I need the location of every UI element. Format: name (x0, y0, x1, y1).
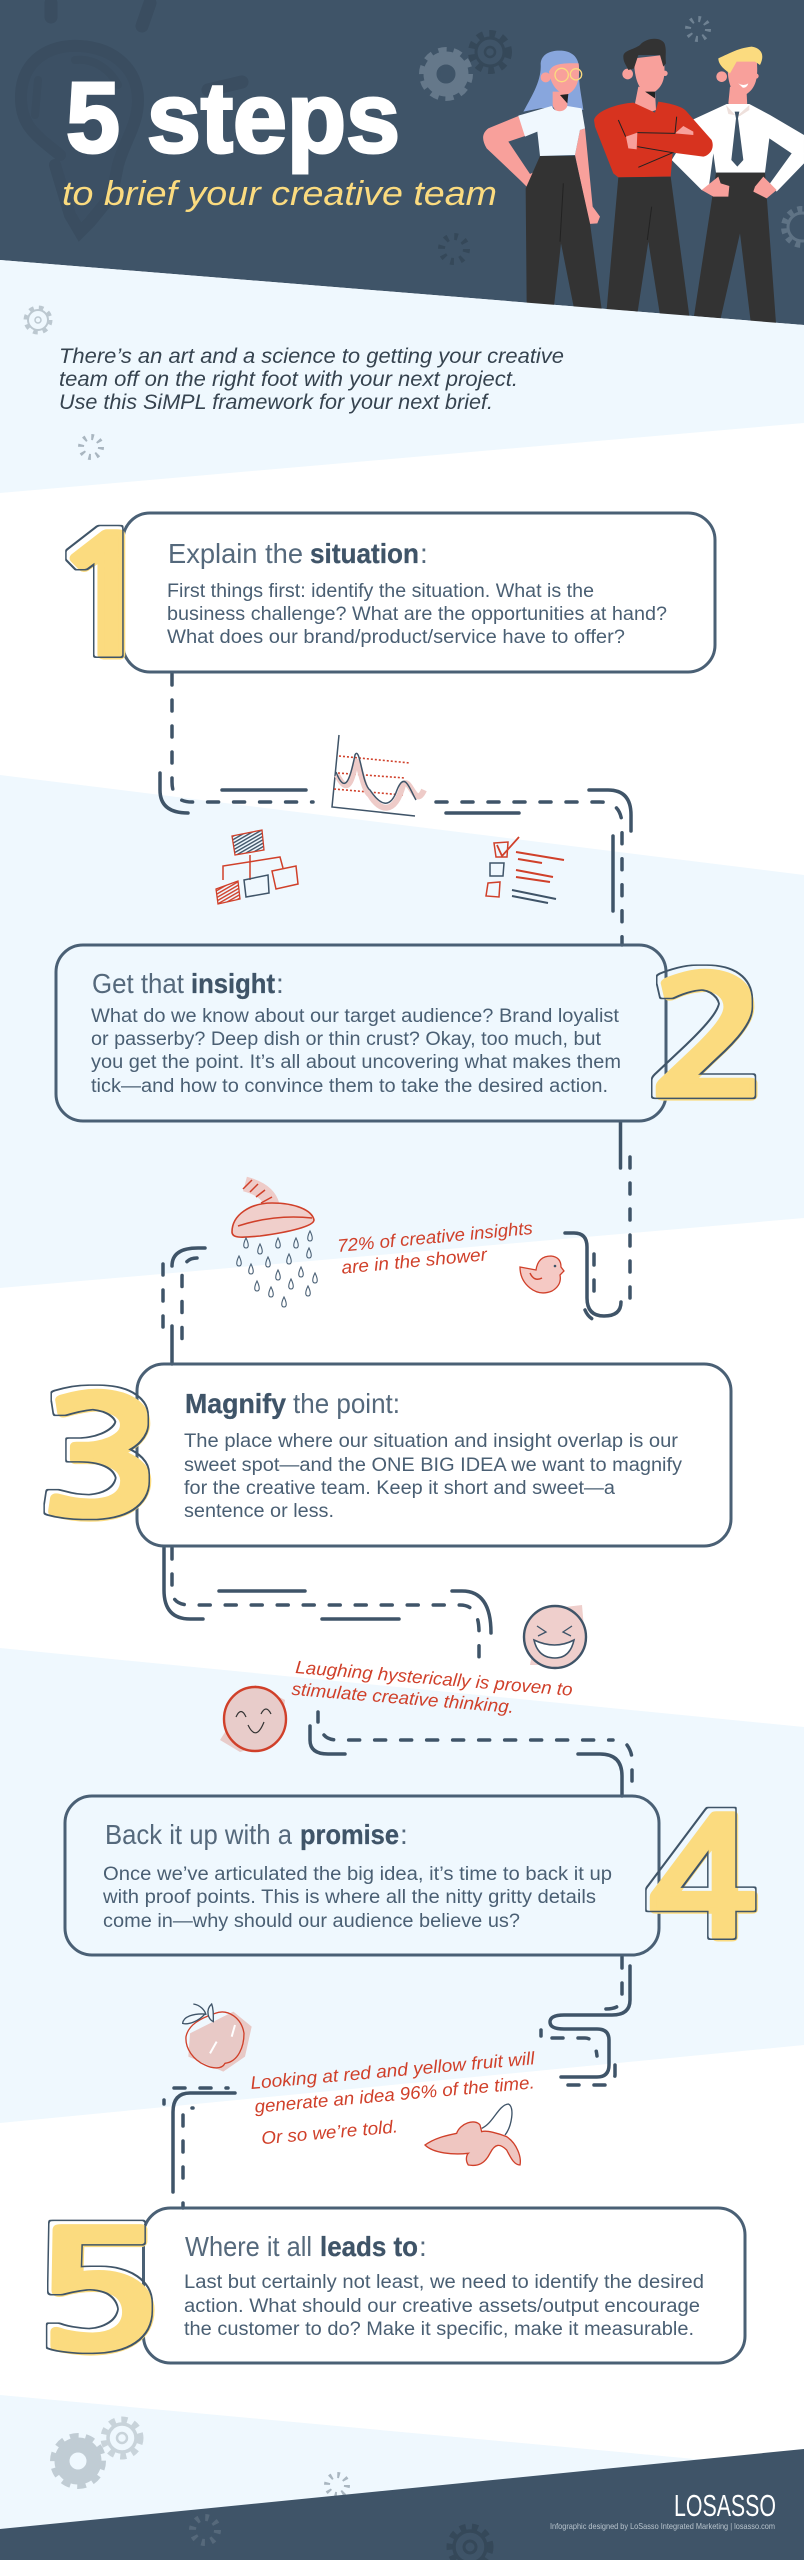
subtitle: to brief your creative team (62, 175, 497, 213)
callout: laughing stat: stimulate creative thinking. (291, 1679, 515, 1717)
body text: tick—and how to convince them to take the desired action. (91, 1076, 608, 1097)
icon: gear right edge (784, 209, 804, 245)
callout: fruit stat: Or so we’re told. (260, 2116, 399, 2148)
callout: laughing stat: Laughing hysterically is proven to (295, 1657, 573, 1700)
heading: : (419, 2231, 427, 2262)
intro text: team off on the right foot with your next project. (59, 368, 518, 391)
body text: What does our brand/product/service have to offer? (167, 627, 625, 648)
body text: sentence or less. (184, 1501, 334, 1522)
icon: sparkle dark (442, 236, 466, 262)
body text: you get the point. It’s all about uncovering what makes them (91, 1052, 621, 1073)
number 1: 1 (45, 515, 163, 678)
band 3 background (0, 1648, 804, 2123)
panel: step 4 (65, 1796, 760, 1962)
icon: footer outline gear (104, 2420, 140, 2456)
icon: filled gear (424, 52, 468, 96)
number 2: 2 (648, 960, 772, 1122)
panel: step 1 (45, 513, 715, 681)
icon: light bulb watermark (21, 3, 242, 232)
number 4: 4 (648, 1801, 760, 1962)
body text (184, 1431, 683, 1522)
body text: Once we’ve articulated the big idea, it’s time to back it up (103, 1864, 612, 1885)
icon: smiling face (220, 1685, 286, 1752)
header background (0, 0, 804, 325)
heading: : (420, 538, 428, 569)
person: man in white shirt and tie (672, 47, 804, 323)
body text (91, 1006, 621, 1097)
callout: fruit stat (250, 2048, 541, 2149)
body text: First things first: identify the situation. What is the (167, 581, 594, 602)
icon: banana (425, 2104, 520, 2165)
body text: with proof points. This is where all the nitty gritty details (102, 1887, 596, 1908)
connector: step 4 to step 5 (164, 1957, 630, 2208)
number 1: 1 (48, 518, 166, 681)
heading: leads to (320, 2231, 418, 2262)
body text: or passerby? Deep dish or thin crust? Okay, too much, but (91, 1029, 602, 1050)
heading (92, 968, 284, 999)
intro text: There’s an art and a science to getting your creative (59, 345, 564, 368)
callout: shower stat: are in the shower (341, 1244, 489, 1278)
heading: Magnify (185, 1388, 286, 1419)
callout: laughing stat (291, 1657, 573, 1722)
body text: Last but certainly not least, we need to identify the desired (184, 2272, 704, 2293)
heading: Back it up with a (105, 1819, 292, 1850)
body text (167, 581, 667, 648)
connector: step 1 to step 2 (160, 674, 631, 945)
intro text: Use this SiMPL framework for your next brief. (59, 391, 493, 414)
connector: step 2 to step 3 (163, 1122, 630, 1364)
title: 5 steps (66, 62, 400, 174)
number 5: 5 (33, 2214, 165, 2376)
chart doodle (332, 735, 424, 816)
callout: fruit stat: generate an idea 96% of the time. (254, 2072, 535, 2117)
icon: footer filled gear (55, 2438, 101, 2484)
heading: Explain the (168, 538, 303, 569)
body text: The place where our situation and insight overlap is our (184, 1431, 679, 1452)
icon: shower drops (237, 1231, 317, 1307)
heading (168, 538, 428, 569)
icon: footer dark sparkle (192, 2518, 218, 2542)
number 4: 4 (645, 1798, 757, 1959)
panel: step 5 (30, 2208, 745, 2376)
heading: promise (300, 1819, 399, 1850)
heading: situation (310, 538, 419, 569)
icon: rubber duck (520, 1256, 564, 1293)
body text: for the creative team. Keep it short and sweet—a (184, 1478, 615, 1499)
illustration: three team members (483, 39, 804, 323)
number 3: 3 (37, 1377, 161, 1539)
heading: : (276, 968, 284, 999)
body text: action. What should our creative assets/output encourage (184, 2296, 700, 2317)
heading: : (400, 1819, 408, 1850)
number 5: 5 (30, 2211, 162, 2373)
checklist doodle (486, 837, 564, 903)
icon: laughing face (524, 1605, 586, 1668)
band 4 background (0, 2395, 804, 2560)
icon: strawberry (183, 2004, 252, 2072)
heading: Get that (92, 968, 184, 999)
icon: sparkle top right (688, 19, 708, 39)
heading (185, 1388, 400, 1419)
icon: footer sparkle (327, 2475, 347, 2495)
footer credit: Infographic designed by LoSasso Integrated Marketing | losasso.com (550, 2521, 775, 2531)
panel: step 3 (37, 1364, 731, 1546)
body text: business challenge? What are the opportunities at hand? (167, 604, 667, 625)
footer dark band (0, 2449, 804, 2560)
icon: intro sparkle (81, 437, 101, 457)
connector: step 3 to step 4 (164, 1548, 632, 1796)
intro band background (0, 260, 804, 493)
org chart doodle (216, 830, 298, 904)
body text: the customer to do? Make it specific, make it measurable. (184, 2319, 694, 2340)
person: man in red sweater (594, 39, 713, 316)
body text (102, 1864, 612, 1932)
icon: shower head (232, 1180, 314, 1237)
number 2: 2 (645, 957, 769, 1119)
icon: footer dark gear (450, 2527, 490, 2560)
number 3: 3 (40, 1380, 164, 1542)
callout: shower stat: 72% of creative insights (337, 1218, 534, 1256)
icon: intro gear (26, 308, 50, 332)
body text: What do we know about our target audience? Brand loyalist (91, 1006, 620, 1027)
heading: Where it all (185, 2231, 312, 2262)
panel: step 2 (56, 945, 772, 1122)
body text (184, 2272, 704, 2340)
heading (185, 2231, 427, 2262)
callout: fruit stat: Looking at red and yellow fruit will (250, 2048, 536, 2093)
band 2 background (0, 775, 804, 1288)
intro text (59, 345, 564, 414)
body text: sweet spot—and the ONE BIG IDEA we want to magnify (184, 1455, 683, 1476)
icon: outline gear (472, 34, 508, 70)
person: woman (483, 51, 602, 309)
heading (105, 1819, 408, 1850)
body text: come in—why should our audience believe us? (103, 1911, 520, 1932)
heading: the point: (293, 1388, 400, 1419)
callout: shower stat (337, 1218, 536, 1278)
heading: insight (191, 968, 275, 999)
